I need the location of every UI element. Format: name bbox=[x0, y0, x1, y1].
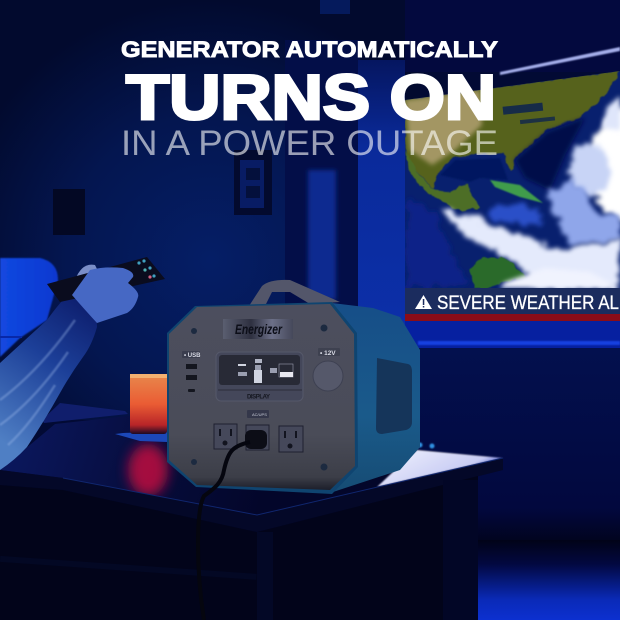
red candle reflection bbox=[128, 444, 168, 496]
land: North America bbox=[405, 71, 620, 190]
candle bbox=[115, 374, 167, 442]
table body bbox=[0, 476, 478, 620]
plug and cord bbox=[198, 430, 267, 620]
table top bbox=[0, 416, 503, 515]
ac button bbox=[247, 410, 269, 418]
blue edge bbox=[167, 302, 358, 494]
picture frames on wall bbox=[53, 150, 272, 235]
handle bbox=[249, 280, 340, 306]
dark ocean patches bbox=[515, 118, 585, 190]
title line 3: IN A POWER OUTAGE bbox=[121, 124, 498, 163]
hand with remote bbox=[47, 257, 165, 323]
side vent bbox=[376, 358, 412, 434]
display panel bbox=[216, 352, 303, 401]
table bbox=[0, 416, 503, 620]
display panel: DISPLAY bbox=[247, 394, 270, 400]
white light reflection bbox=[377, 450, 503, 487]
title text bbox=[121, 37, 498, 163]
12v outlet: • 12V bbox=[320, 350, 336, 357]
arm with sleeve bbox=[0, 296, 97, 470]
usb label and ports: • USB bbox=[184, 353, 201, 359]
icon: warning triangle bbox=[415, 295, 432, 309]
generator bbox=[167, 280, 420, 620]
sofa bbox=[0, 258, 58, 357]
table leg bbox=[257, 532, 273, 620]
side blue housing bbox=[332, 303, 420, 492]
ac outlets bbox=[214, 424, 303, 452]
front face bbox=[169, 304, 355, 490]
ac button: AC/UPS bbox=[252, 412, 267, 417]
screws bbox=[191, 328, 197, 334]
ceiling light strip bbox=[500, 47, 620, 75]
title line 1: GENERATOR AUTOMATICALLY bbox=[121, 37, 498, 62]
12v outlet bbox=[313, 348, 343, 391]
front edge bbox=[0, 458, 503, 532]
clouds: band bbox=[437, 206, 620, 288]
news ticker bbox=[405, 288, 620, 321]
land: South America bbox=[468, 257, 527, 288]
brand plate bbox=[223, 319, 293, 339]
blue lights behind generator bbox=[418, 442, 434, 448]
usb label and ports bbox=[182, 351, 201, 392]
screen: satellite hurricane map bbox=[405, 71, 620, 290]
laptop on table bbox=[42, 403, 128, 423]
clouds: hurricane bbox=[592, 110, 620, 220]
title line 2: TURNS ON bbox=[126, 63, 496, 133]
brand plate: Energizer bbox=[235, 321, 283, 337]
